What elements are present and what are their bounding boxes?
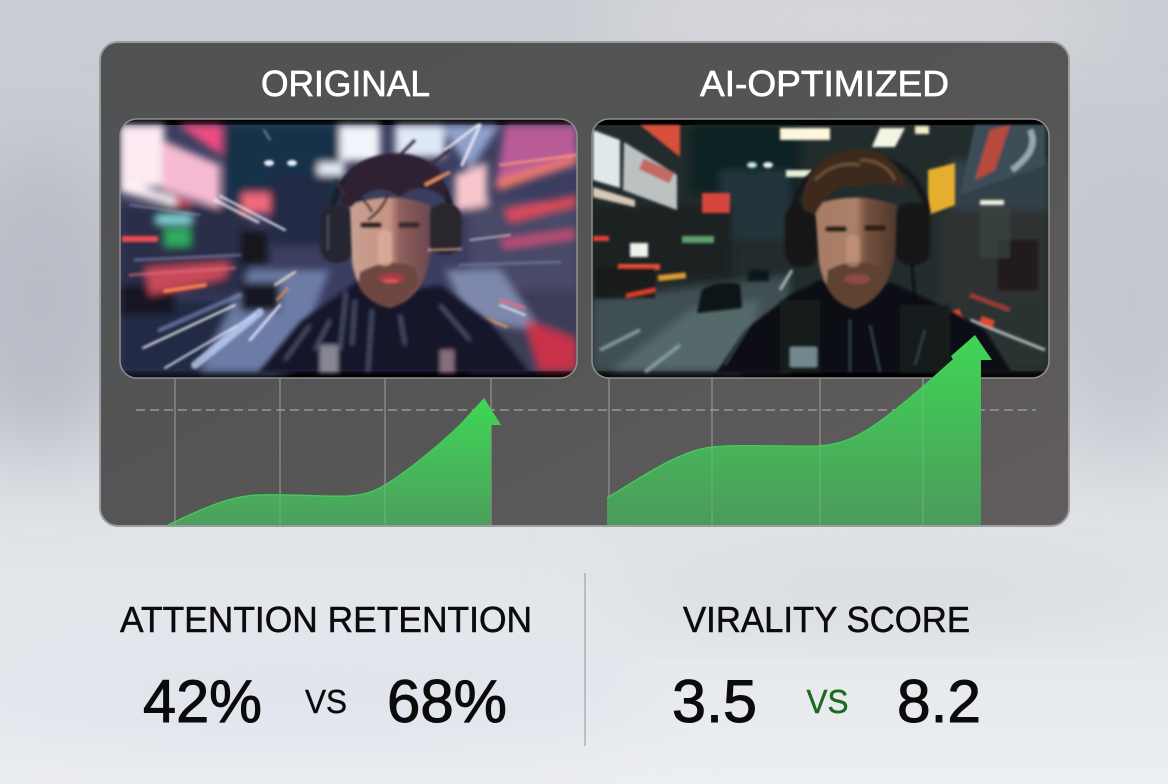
photo: AI-optimized frame outline bbox=[592, 119, 1049, 378]
chart: original retention curve with arrow bbox=[168, 398, 501, 525]
chart: target dashed line bbox=[136, 409, 1036, 411]
photo: AI-optimized sharp frame bbox=[592, 119, 1049, 378]
value: 68 percent: 68% bbox=[387, 668, 507, 735]
label: vs: VS bbox=[305, 683, 347, 720]
value: 8.2: 8.2 bbox=[897, 668, 981, 735]
metric: virality score bbox=[672, 599, 981, 735]
face bbox=[335, 140, 462, 308]
face bbox=[803, 150, 907, 309]
chart: optimized retention curve with arrow bbox=[607, 335, 992, 525]
chart: optimized grid lines bbox=[609, 378, 923, 525]
headphones bbox=[320, 160, 462, 263]
divider bbox=[584, 573, 586, 746]
value: 3.5: 3.5 bbox=[672, 668, 757, 735]
jacket bbox=[258, 272, 530, 373]
metric: attention retention bbox=[120, 599, 532, 735]
headphones bbox=[785, 155, 930, 302]
photo: original frame outline bbox=[120, 119, 577, 378]
heading: original: ORIGINAL bbox=[261, 63, 430, 104]
metric heading: virality score: VIRALITY SCORE bbox=[683, 599, 970, 640]
panel: comparison card bbox=[100, 42, 1069, 526]
jacket bbox=[716, 280, 1012, 373]
label: green vs: VS bbox=[806, 683, 848, 720]
chart: original grid lines bbox=[175, 378, 491, 525]
heading: AI-optimized: AI-OPTIMIZED bbox=[700, 63, 949, 104]
metric heading: attention retention: ATTENTION RETENTION bbox=[120, 599, 532, 640]
photo: original blurred frame bbox=[120, 119, 577, 378]
value: 42 percent: 42% bbox=[143, 668, 262, 735]
